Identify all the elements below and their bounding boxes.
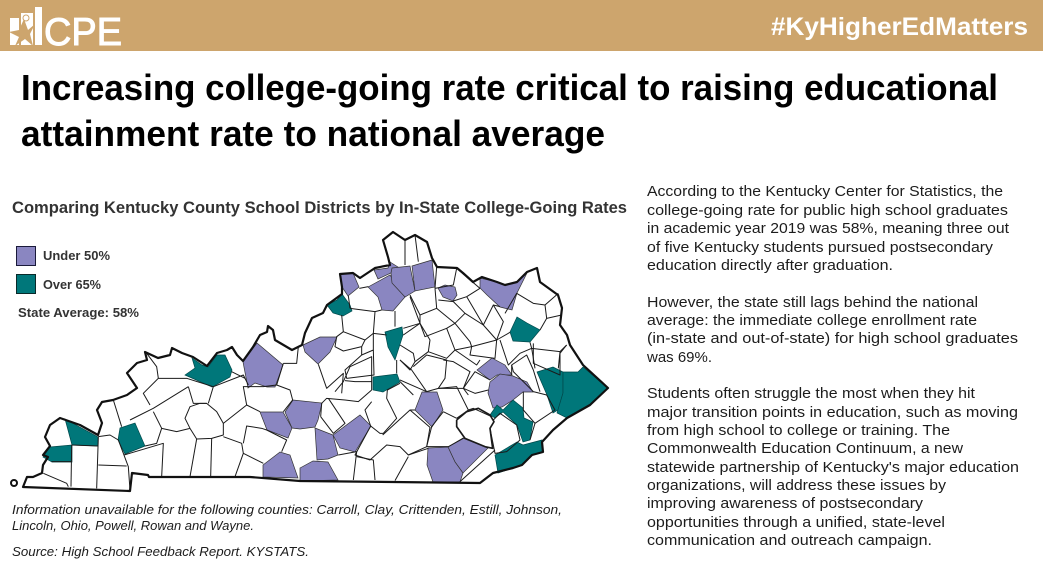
footnote: Information unavailable for the following counties: Carroll, Clay, Crittenden, Estill, Johnson, — [12, 503, 562, 517]
paragraph 2: However, the state still lags behind the national — [647, 294, 978, 311]
paragraph 1: college-going rate for public high school graduates — [647, 202, 1008, 219]
paragraph 3: from high school to college or training. The — [647, 422, 950, 439]
icon: CPE logo mark — [9, 7, 42, 46]
paragraph 3: organizations, will address these issues by — [647, 477, 947, 494]
paragraph 1: education directly after graduation. — [647, 257, 893, 274]
paragraph 2: was 69%. — [646, 349, 712, 366]
paragraph 3: opportunities through a unified, state-level — [647, 514, 945, 531]
paragraph 3: improving awareness of postsecondary — [647, 495, 924, 512]
paragraph 1: in academic year 2019 was 58%, meaning three out — [647, 220, 1010, 237]
paragraph 3: statewide partnership of Kentucky's major education — [647, 459, 1019, 476]
island — [11, 480, 17, 486]
county borders: south-east — [321, 343, 567, 482]
state average: State Average: 58% — [18, 306, 139, 320]
legend: under 50%: Under 50% — [43, 249, 110, 263]
paragraph 2: average: the immediate college enrollment rate — [647, 312, 977, 329]
legend: over 65%: Over 65% — [43, 278, 101, 292]
title: attainment rate to national average — [21, 113, 605, 154]
paragraph 3: Students often struggle the most when they hit — [647, 385, 976, 402]
county borders: north — [318, 235, 567, 395]
paragraph 1: of five Kentucky students pursued postsecondary — [647, 239, 994, 256]
hashtag: #KyHigherEdMatters — [771, 13, 1028, 41]
paragraph 3: major transition points in education, such as moving — [647, 404, 1018, 421]
state outline — [23, 232, 608, 491]
title — [21, 67, 998, 154]
paragraph 1 — [647, 183, 1010, 274]
map heading: Comparing Kentucky County School Districts by In-State College-Going Rates — [12, 199, 627, 217]
paragraph 3: communication and outreach campaign. — [647, 532, 932, 549]
title: Increasing college-going rate critical to raising educational — [21, 67, 998, 108]
paragraph 3: Commonwealth Education Continuum, a new — [647, 440, 963, 457]
Kentucky county map — [11, 232, 608, 491]
over 65% counties — [43, 294, 608, 473]
footnote — [12, 503, 562, 533]
CPE wordmark: CPE — [44, 11, 122, 54]
under 50% counties — [243, 260, 533, 482]
paragraph 3 — [647, 385, 1019, 549]
legend — [16, 246, 139, 320]
paragraph 1: According to the Kentucky Center for Statistics, the — [647, 183, 1003, 200]
source: Source: High School Feedback Report. KYSTATS. — [12, 545, 309, 559]
header band — [0, 0, 1043, 51]
footnote: Lincoln, Ohio, Powell, Rowan and Wayne. — [12, 519, 254, 533]
county borders: west — [43, 347, 298, 490]
paragraph 2 — [646, 294, 1018, 366]
paragraph 2: (in-state and out-of-state) for high school graduates — [647, 330, 1018, 347]
